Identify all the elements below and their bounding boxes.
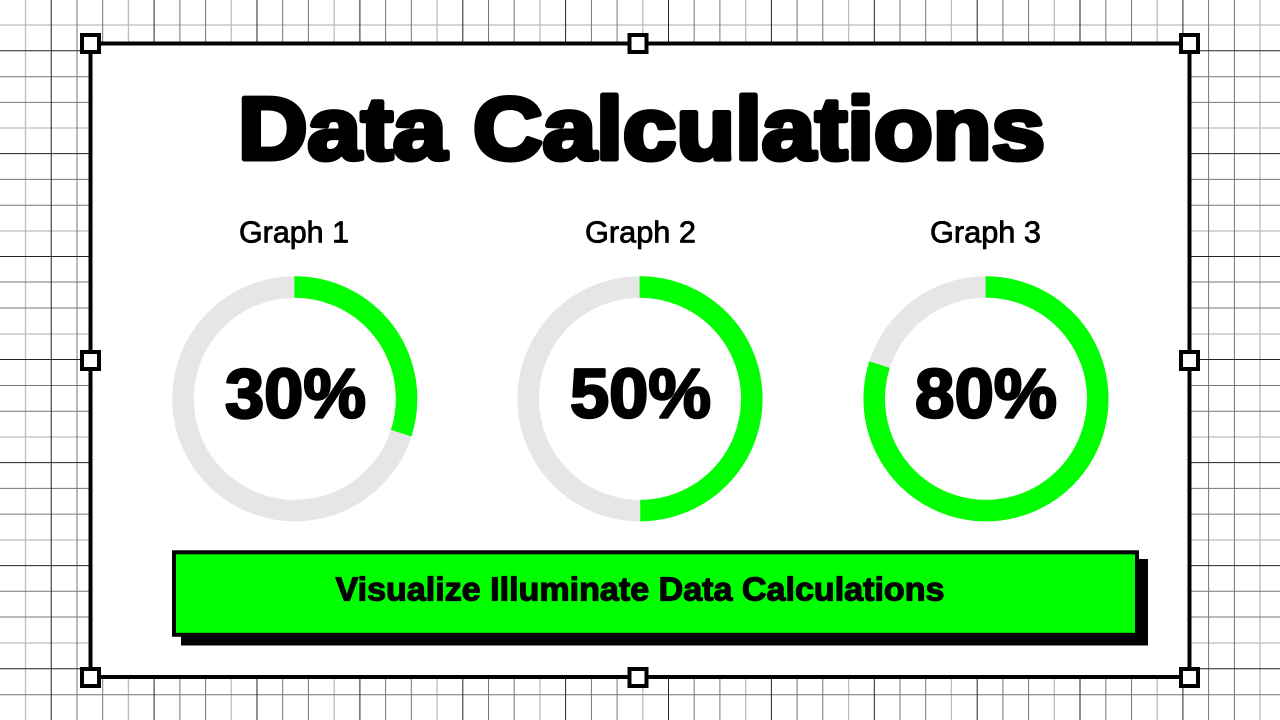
donut chart: 50% [528,287,752,511]
handle: top left [82,35,99,52]
handle: bottom right [1181,669,1198,686]
handle: bottom left [82,669,99,686]
handle: top middle [630,35,646,52]
title: Data Calculations [238,79,1045,178]
label: Graph 2: Graph 2 [585,214,696,250]
selection frame [82,35,1198,686]
donut chart: 80%: 80% [915,354,1057,432]
donut chart: 80% [874,287,1098,511]
banner [174,552,1148,646]
donut chart: 50%: 50% [570,354,711,432]
handle: middle right [1181,352,1198,369]
label: Graph 1: Graph 1 [239,214,349,250]
handle: middle left [82,352,99,369]
handle: top right [1181,35,1198,52]
donut chart: 30% [183,287,407,511]
handle: bottom middle [630,669,646,686]
donut chart: 30%: 30% [225,354,366,432]
banner text: Visualize Illuminate Data Calculations [336,570,944,608]
label: Graph 3: Graph 3 [930,214,1041,250]
